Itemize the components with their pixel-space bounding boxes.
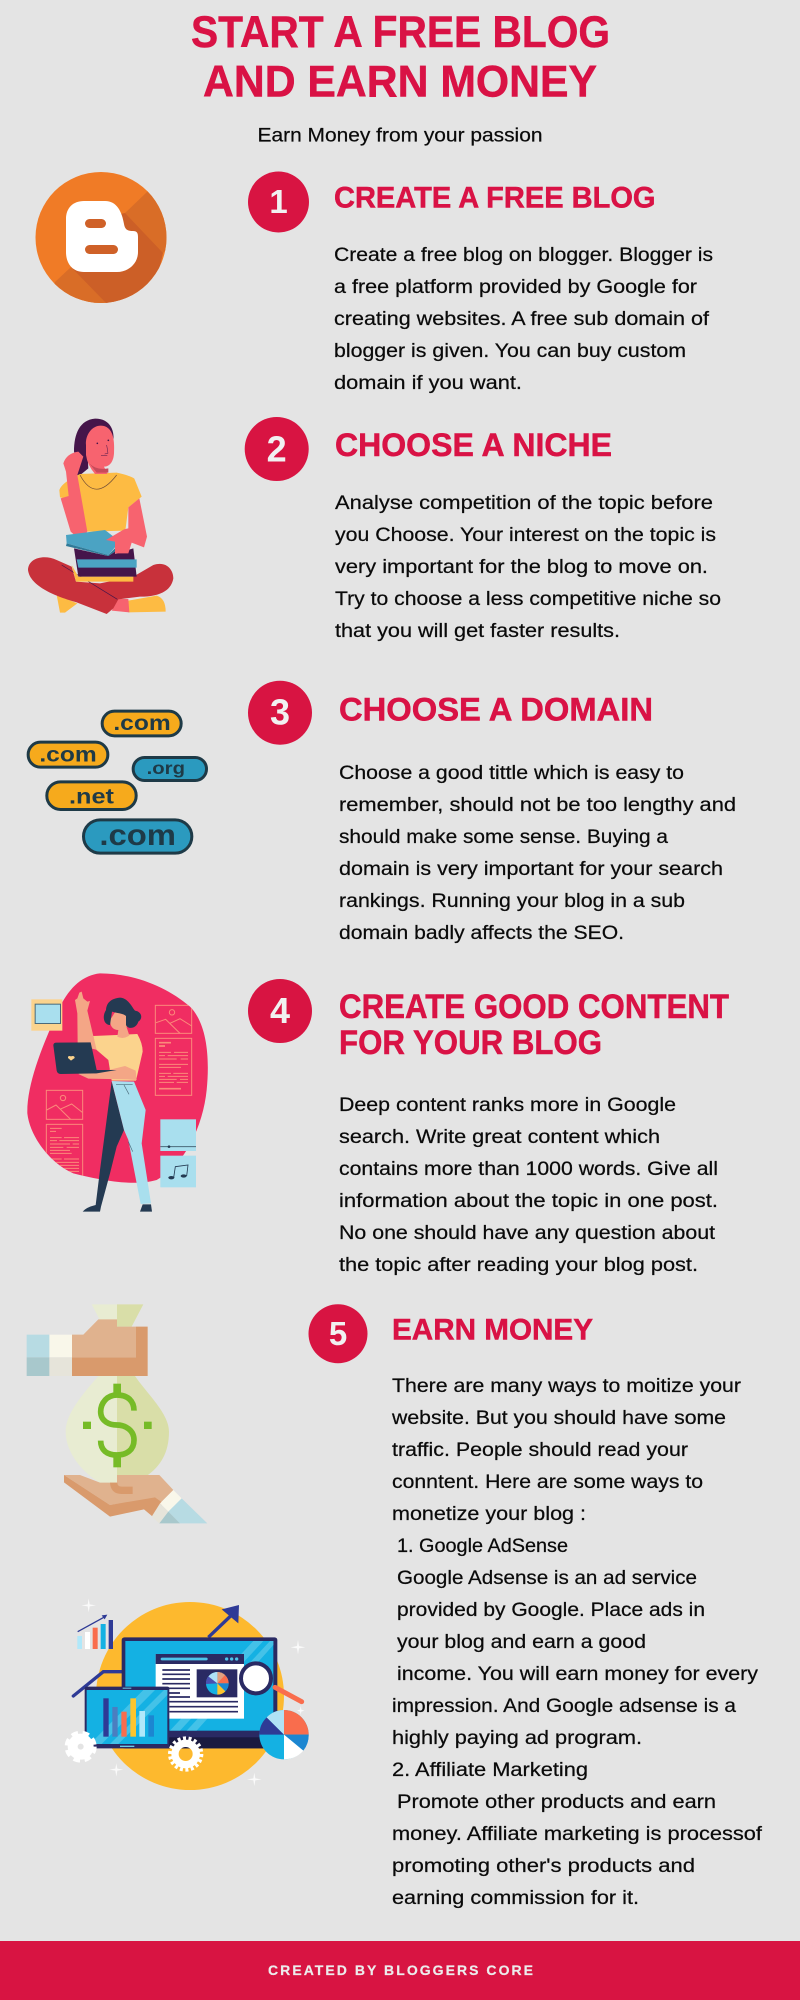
title [191,8,610,106]
icon: woman sitting with books [28,419,173,614]
body text: step 5: monetize your blog : [392,1504,586,1525]
heading: create good content for your blog [339,988,729,1062]
body text: step 4 [339,1095,718,1276]
number badge 3: 3 [270,692,290,732]
footer bar: CREATED BY BLOGGERS CORE [268,1962,533,1978]
body text: step 5: highly paying ad program. [392,1728,642,1749]
body text: step 5: 2. Affiliate Marketing [392,1760,588,1781]
number badge 5: 5 [329,1315,347,1352]
body text: step 2 [335,493,721,642]
body text: step 3: remember, should not be too lengthy and [339,795,736,816]
body text: step 3: should make some sense. Buying a [339,827,668,848]
body text: step 1: creating websites. A free sub domain of [334,309,710,330]
icon: hands passing money bag [27,1304,207,1523]
number badge 3 [248,681,312,745]
body text: step 2: that you will get faster results. [335,621,620,642]
panel: step 1 create a free blog [36,172,713,394]
body text: step 4: contains more than 1000 words. Give all [339,1159,718,1180]
body text: step 4: No one should have any question about [339,1223,716,1244]
body text: step 5 [391,1376,763,1909]
icon: domain name pills: .com [99,819,176,852]
icon: domain name pills: .com [113,711,171,735]
title: START A FREE BLOG [191,8,610,57]
body text: step 2: Analyse competition of the topic before [335,493,713,514]
number badge 4 [248,979,312,1043]
body text: step 1: blogger is given. You can buy custom [334,341,686,362]
panel: step 2 choose a niche [28,417,721,642]
heading: create good content for your blog: CREATE GOOD CONTENT [339,988,729,1026]
footer bar [0,1941,800,2000]
icon: domain name pills: .com [39,743,97,767]
panel: step 4 create good content [27,973,729,1276]
body text: step 3: domain is very important for your search [339,859,723,880]
body text: step 1: Create a free blog on blogger. Blogger is [334,245,713,266]
body text: step 5: traffic. People should read your [392,1440,689,1461]
body text: step 1: a free platform provided by Google for [334,277,698,298]
body text: step 5: promoting other's products and [392,1856,695,1877]
number badge 5 [308,1304,368,1363]
body text: step 5: Promote other products and earn [397,1792,716,1813]
body text: step 4: the topic after reading your blog post. [339,1255,698,1276]
body text: step 2: Try to choose a less competitive niche so [335,589,721,610]
panel: step 5 earn money [27,1304,763,1909]
body text: step 4: information about the topic in one post. [339,1191,718,1212]
icon: woman with laptop on pink blob [27,973,208,1212]
body text: step 5: earning commission for it. [392,1888,639,1909]
body text: step 1 [334,245,713,394]
icon: domain name pills: .net [69,784,114,808]
number badge 2: 2 [267,428,287,470]
body text: step 5: provided by Google. Place ads in [397,1600,705,1621]
body text: step 3: rankings. Running your blog in a sub [339,891,685,912]
icon: analytics dashboard [67,1598,309,1790]
number badge 2 [245,417,309,481]
heading: create a free blog: CREATE A FREE BLOG [334,182,656,214]
body text: step 5: impression. And Google adsense is a [392,1696,736,1717]
icon: domain name pills [28,711,206,853]
icon: domain name pills: .org [147,758,185,778]
body text: step 3 [339,763,736,944]
body text: step 4: search. Write great content which [339,1127,660,1148]
body text: step 2: very important for the blog to move on. [335,557,708,578]
number badge 1: 1 [269,183,288,220]
heading: earn money: EARN MONEY [392,1314,593,1347]
body text: step 5: website. But you should have some [391,1408,726,1429]
body text: step 3: Choose a good tittle which is easy to [339,763,684,784]
body text: step 4: Deep content ranks more in Google [339,1095,676,1116]
panel: step 3 choose a domain [28,681,736,944]
body text: step 5: There are many ways to moitize your [392,1376,742,1397]
body text: step 5: 1. Google AdSense [397,1536,568,1557]
number badge 4: 4 [270,990,290,1031]
heading: choose a domain: CHOOSE A DOMAIN [339,692,653,728]
body text: step 5: Google Adsense is an ad service [397,1568,697,1589]
heading: create good content for your blog: FOR YOUR BLOG [339,1024,602,1062]
number badge 1 [248,172,309,232]
body text: step 1: domain if you want. [334,373,522,394]
body text: step 5: conntent. Here are some ways to [392,1472,703,1493]
title: AND EARN MONEY [203,58,597,106]
body text: step 2: you Choose. Your interest on the topic is [335,525,716,546]
body text: step 5: your blog and earn a good [397,1632,646,1653]
icon: blogger logo [36,172,166,303]
subtitle: Earn Money from your passion [258,126,542,146]
heading: choose a niche: CHOOSE A NICHE [335,427,612,463]
body text: step 5: income. You will earn money for every [397,1664,759,1685]
body text: step 3: domain badly affects the SEO. [339,923,624,944]
body text: step 5: money. Affiliate marketing is processof [392,1824,763,1845]
